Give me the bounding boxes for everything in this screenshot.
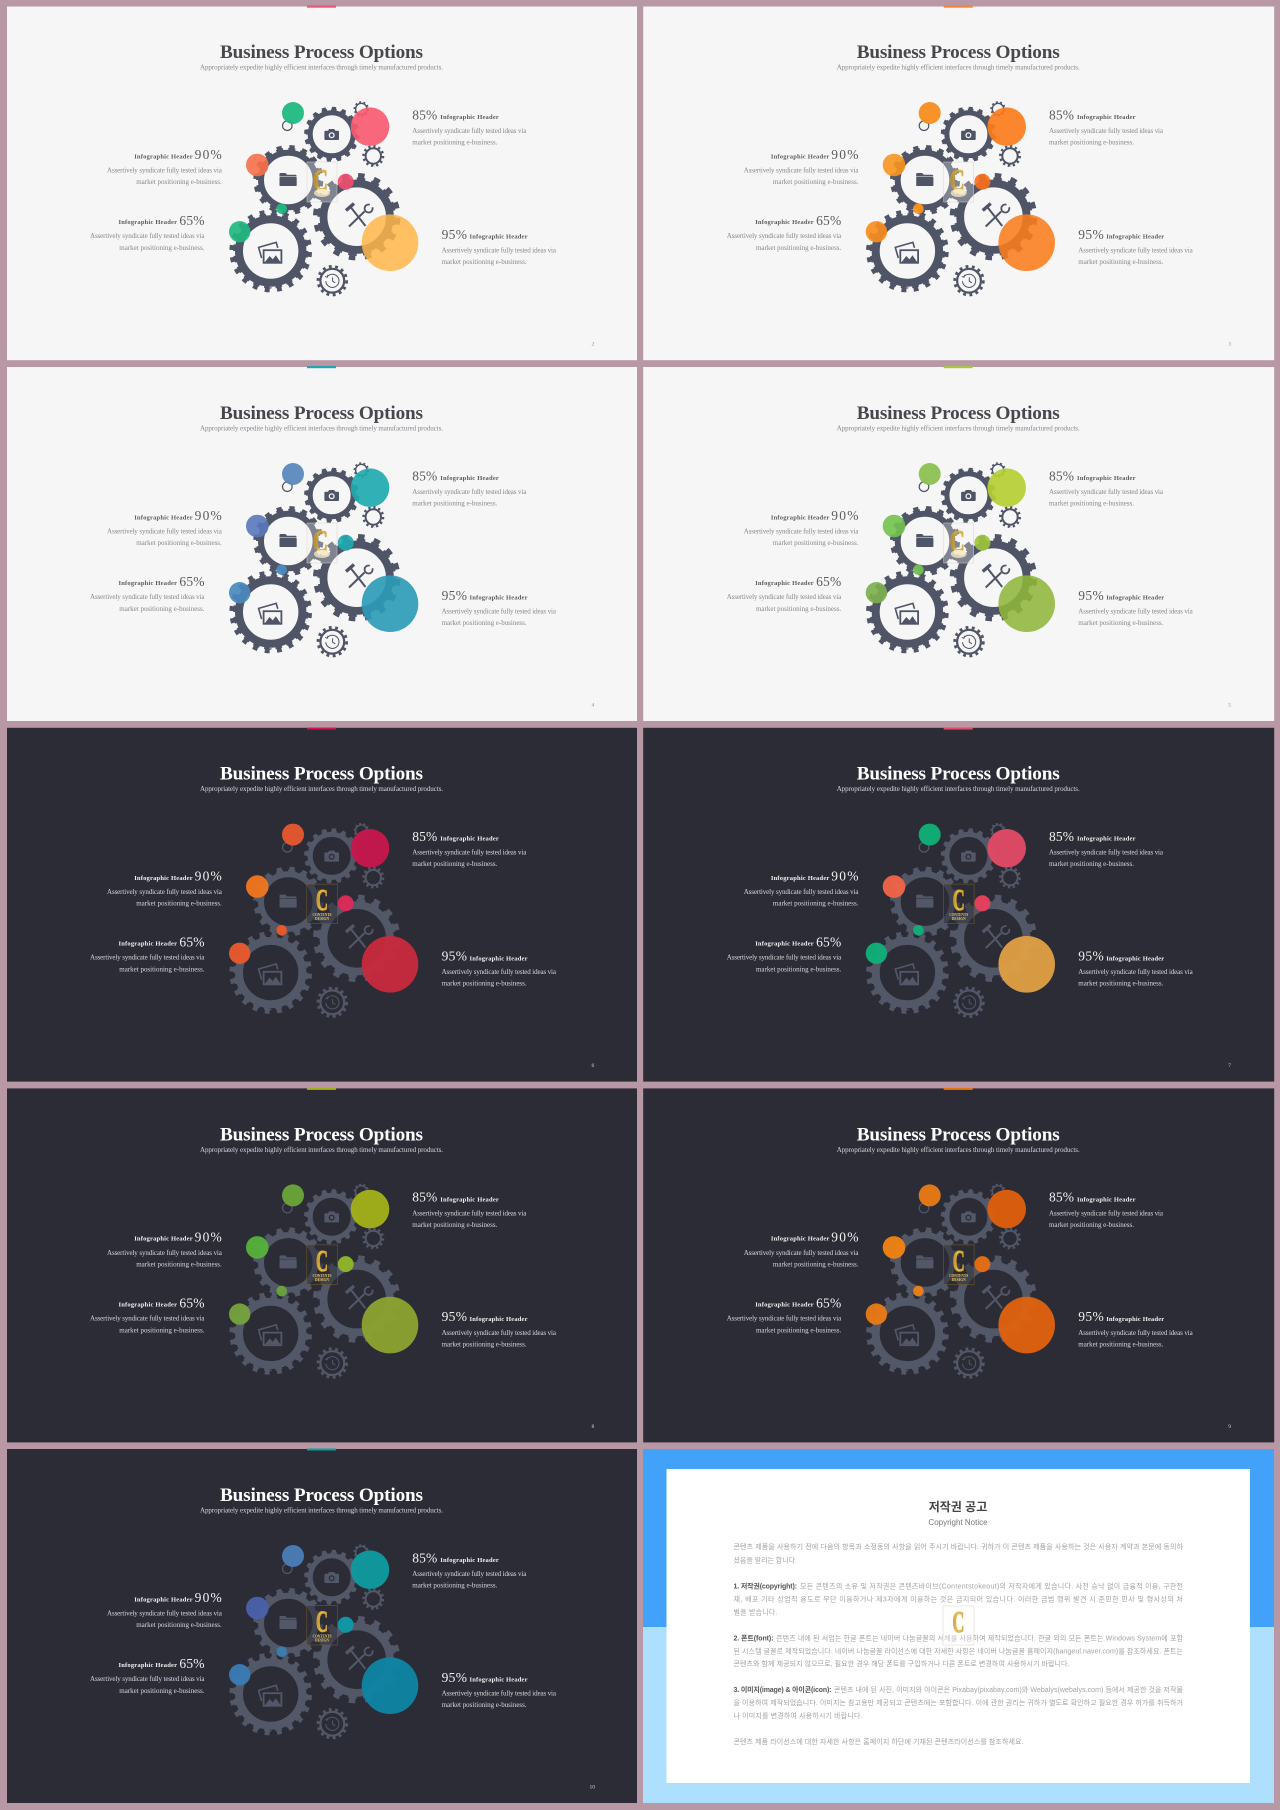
callout 85%: market positioning e-business. <box>1049 1221 1134 1229</box>
watermark stamp: C <box>316 882 328 917</box>
watermark stamp <box>944 882 974 924</box>
watermark stamp: C <box>950 523 965 558</box>
callout 65%: market positioning e-business. <box>119 1687 205 1695</box>
callout 65%: Assertively syndicate fully tested ideas via <box>727 954 842 962</box>
callout 90% <box>107 1590 223 1629</box>
panel: slide 5 light green <box>643 366 1274 721</box>
slide background <box>7 1449 637 1803</box>
callout 65%: market positioning e-business. <box>119 605 205 613</box>
page number: 4 <box>592 702 594 708</box>
callout 85%: Assertively syndicate fully tested ideas via <box>412 127 527 135</box>
callout 85%: 85% <box>412 468 437 483</box>
callout 65%: Assertively syndicate fully tested ideas via <box>727 593 842 601</box>
page number: 7 <box>1228 1063 1231 1069</box>
callout 95%: 95% <box>442 227 467 242</box>
slide background <box>7 6 637 360</box>
callout 95%: Assertively syndicate fully tested ideas via <box>442 246 557 254</box>
callout 95% <box>442 1309 557 1348</box>
watermark stamp: CONTENTS <box>312 1634 332 1638</box>
callout 85%: 85% <box>412 1190 437 1205</box>
watermark stamp: DESIGN <box>315 1278 329 1282</box>
accent bar <box>307 6 336 8</box>
callout 65%: 65% <box>179 574 204 589</box>
callout 65% <box>90 1656 205 1695</box>
callout 90%: Infographic Header <box>134 153 193 160</box>
paragraph 1 copyright: 1. 저작권(copyright): <box>734 1581 797 1590</box>
subtitle: Appropriately expedite highly efficient interfaces through timely manufactured products. <box>200 64 443 72</box>
callout 85% <box>412 829 527 868</box>
slide background <box>7 1088 637 1442</box>
callout 95%: Assertively syndicate fully tested ideas via <box>1078 608 1194 616</box>
callout 90% <box>744 147 859 186</box>
callout 90%: 90% <box>831 508 859 523</box>
callout 85%: market positioning e-business. <box>412 1582 498 1590</box>
callout 95%: Assertively syndicate fully tested ideas via <box>442 1690 557 1698</box>
callout 90%: Infographic Header <box>134 514 193 521</box>
callout 65% <box>90 935 205 974</box>
callout 90%: Infographic Header <box>134 875 193 882</box>
callout 65%: 65% <box>179 1295 204 1310</box>
panel: slide 9 dark orange <box>643 1088 1274 1442</box>
gear diagram <box>866 824 1055 1017</box>
paragraph 1 copyright: 재, 배포 기타 상업적 용도로 무단 이용하거나 제3자에게 이용하는 것은 금지되어 있습니다. 이러한 금법 행위 발견 시 준민한 민사 및 형사상의 처 <box>734 1594 1183 1603</box>
intro paragraph: 콘텐츠 제품을 사용하기 전에 다음의 항목과 소정동의 사항을 읽어 주시기 바랍니다. 귀하가 이 콘텐츠 제품을 사용하는 것은 사용자 계약과 본문에 동의하 <box>734 1542 1184 1551</box>
callout 85%: market positioning e-business. <box>412 1221 498 1229</box>
callout 65% <box>90 213 205 252</box>
callout 95%: 95% <box>442 948 467 963</box>
callout 95%: Assertively syndicate fully tested ideas via <box>442 968 557 976</box>
paragraph 1 copyright: 모든 콘텐츠의 소유 및 저작권은 콘텐츠바이브(Contentstokeout)의 저작자에게 있습니다. 사전 승낙 없이 금융적 이용, 구한전 <box>800 1581 1183 1590</box>
callout 95%: market positioning e-business. <box>442 258 527 266</box>
callout 95%: Assertively syndicate fully tested ideas via <box>442 608 557 616</box>
title: Business Process Options <box>220 1124 423 1145</box>
callout 95% <box>1078 588 1194 627</box>
title: Business Process Options <box>220 764 423 785</box>
subtitle: Appropriately expedite highly efficient interfaces through timely manufactured products. <box>200 1506 443 1514</box>
paragraph 2 font: 콘텐츠 내에 된 서업는 한글 폰트는 네이버 나눔글꼴의 서체를 사용하여 제작되었습니다. 한글 외의 모든 폰트는 Windows System에 포함 <box>776 1633 1184 1642</box>
callout 65%: 65% <box>816 1295 841 1310</box>
watermark stamp <box>944 1243 974 1284</box>
callout 85% <box>412 468 527 508</box>
callout 90% <box>107 508 223 547</box>
callout 90%: Infographic Header <box>771 153 829 160</box>
blue background top <box>643 1449 1274 1627</box>
callout 90%: market positioning e-business. <box>773 539 859 547</box>
page number: 3 <box>1228 342 1231 348</box>
callout 65%: Infographic Header <box>118 580 177 587</box>
callout 65%: 65% <box>179 213 204 228</box>
paragraph 1 copyright <box>734 1581 1183 1616</box>
watermark stamp: DESIGN <box>952 917 966 921</box>
callout 85%: Assertively syndicate fully tested ideas via <box>1049 127 1164 135</box>
callout 65%: Assertively syndicate fully tested ideas via <box>727 232 842 240</box>
panel: copyright notice <box>643 1449 1274 1803</box>
slide background <box>643 728 1274 1082</box>
callout 90%: market positioning e-business. <box>773 178 859 186</box>
gear diagram <box>229 463 418 656</box>
slide background <box>643 6 1274 360</box>
title: Business Process Options <box>220 1485 423 1506</box>
watermark stamp <box>307 882 337 924</box>
callout 85%: Infographic Header <box>1077 1196 1136 1203</box>
paragraph 3 image and icon <box>734 1685 1184 1720</box>
license note: 콘텐츠 제품 라이선스에 대한 자세한 사항은 홈페이지 하단에 기재된 콘텐츠라이선스를 참조하세요. <box>734 1737 1024 1746</box>
callout 65%: Infographic Header <box>118 219 177 226</box>
page number: 2 <box>592 342 594 348</box>
panel: slide 7 dark multicolor <box>643 728 1274 1082</box>
callout 90%: market positioning e-business. <box>136 1621 222 1629</box>
callout 95%: Assertively syndicate fully tested ideas via <box>1078 1329 1194 1337</box>
paragraph 2 font: 콘텐츠와 함께 제공되지 않으므로, 필요한 경우 해당 폰트를 구입하거나 다른 폰트로 변경하여 사용하시기 바랍니다. <box>734 1659 1070 1668</box>
watermark stamp: C <box>316 1243 328 1278</box>
subtitle: Appropriately expedite highly efficient interfaces through timely manufactured products. <box>200 424 443 432</box>
callout 95% <box>442 948 557 988</box>
callout 85%: Infographic Header <box>440 1557 499 1564</box>
callout 90%: Infographic Header <box>771 875 829 882</box>
accent bar <box>307 728 336 730</box>
watermark stamp <box>307 1604 337 1645</box>
accent bar <box>307 366 336 368</box>
callout 90%: Assertively syndicate fully tested ideas via <box>107 166 223 174</box>
paragraph 3 image and icon: 나 이미지를 변경하여 사용하시기 바랍니다. <box>734 1711 863 1720</box>
callout 95%: Infographic Header <box>1106 234 1164 241</box>
title: Business Process Options <box>220 42 423 63</box>
callout 95%: market positioning e-business. <box>442 619 527 627</box>
callout 90% <box>744 508 859 547</box>
callout 90%: Assertively syndicate fully tested ideas via <box>744 888 859 896</box>
watermark stamp <box>943 1604 974 1645</box>
page number: 10 <box>590 1784 595 1790</box>
page number: 8 <box>592 1424 594 1430</box>
callout 65%: 65% <box>816 935 841 950</box>
page number: 6 <box>592 1063 594 1069</box>
callout 85%: Infographic Header <box>1077 836 1136 843</box>
callout 85% <box>412 107 527 146</box>
callout 85% <box>412 1550 527 1590</box>
watermark stamp: C <box>313 523 328 558</box>
paragraph 3 image and icon: 3. 이미지(image) & 아이콘(icon): <box>734 1685 832 1694</box>
callout 85%: 85% <box>1049 468 1074 483</box>
subtitle: Appropriately expedite highly efficient interfaces through timely manufactured products. <box>837 1146 1080 1154</box>
accent bar <box>307 1088 336 1090</box>
callout 90%: Assertively syndicate fully tested ideas via <box>744 528 859 536</box>
page number: 5 <box>1228 702 1231 708</box>
callout 90%: market positioning e-business. <box>136 900 222 908</box>
accent bar <box>944 366 973 368</box>
callout 65%: market positioning e-business. <box>119 244 205 252</box>
white card <box>666 1469 1250 1783</box>
callout 95%: Infographic Header <box>1106 955 1164 962</box>
watermark stamp: C <box>316 1604 328 1638</box>
callout 65%: Infographic Header <box>118 1301 177 1308</box>
accent bar <box>944 728 973 730</box>
callout 85% <box>1049 468 1164 508</box>
callout 95%: 95% <box>1078 948 1104 963</box>
callout 90%: Infographic Header <box>771 1236 829 1243</box>
callout 90%: Assertively syndicate fully tested ideas via <box>107 528 223 536</box>
callout 90%: Infographic Header <box>134 1596 193 1603</box>
callout 95%: Infographic Header <box>470 595 528 602</box>
watermark stamp: C <box>953 882 965 917</box>
watermark stamp: DESIGN <box>315 917 329 921</box>
callout 95%: market positioning e-business. <box>442 980 527 988</box>
title: Business Process Options <box>857 764 1060 785</box>
callout 85% <box>1049 107 1164 146</box>
gear diagram <box>866 1184 1055 1377</box>
gear diagram <box>866 463 1055 656</box>
intro paragraph: 셨음을 알리는 합니다. <box>734 1555 797 1564</box>
watermark stamp <box>307 1243 337 1284</box>
callout 85%: market positioning e-business. <box>412 860 498 868</box>
callout 90%: 90% <box>831 1229 859 1244</box>
paragraph 2 font: 2. 폰트(font): <box>734 1634 774 1642</box>
callout 85%: Infographic Header <box>1077 114 1136 121</box>
callout 65% <box>727 935 842 974</box>
callout 90%: market positioning e-business. <box>773 900 859 908</box>
callout 85%: Infographic Header <box>440 836 499 843</box>
panel: slide 4 light blue <box>7 366 637 721</box>
watermark stamp: C <box>950 162 965 197</box>
watermark stamp: C <box>953 1243 965 1278</box>
callout 85%: Assertively syndicate fully tested ideas via <box>1049 1209 1164 1217</box>
callout 65% <box>727 1295 842 1334</box>
callout 95%: 95% <box>442 588 467 603</box>
callout 90%: 90% <box>195 1590 222 1605</box>
callout 95% <box>1078 1309 1194 1348</box>
watermark stamp: C <box>313 162 328 197</box>
callout 90% <box>744 869 859 908</box>
accent bar <box>944 1088 973 1090</box>
callout 85%: market positioning e-business. <box>412 138 498 146</box>
callout 95% <box>442 588 557 627</box>
subtitle: Appropriately expedite highly efficient interfaces through timely manufactured products. <box>200 785 443 793</box>
callout 65%: Infographic Header <box>755 219 814 226</box>
callout 85%: 85% <box>1049 1190 1074 1205</box>
callout 95% <box>1078 227 1194 266</box>
callout 95%: 95% <box>1078 1309 1104 1324</box>
callout 65%: 65% <box>816 213 841 228</box>
callout 95%: 95% <box>1078 588 1104 603</box>
callout 65%: Assertively syndicate fully tested ideas via <box>727 1314 842 1322</box>
callout 95%: Assertively syndicate fully tested ideas via <box>1078 968 1194 976</box>
callout 95%: market positioning e-business. <box>1078 619 1164 627</box>
callout 85%: Infographic Header <box>440 114 499 121</box>
title: Business Process Options <box>857 1124 1060 1145</box>
callout 65%: Infographic Header <box>755 580 814 587</box>
callout 95%: Infographic Header <box>470 1316 528 1323</box>
callout 95%: Infographic Header <box>470 1677 528 1684</box>
callout 90% <box>744 1229 859 1268</box>
gear diagram <box>229 1545 418 1738</box>
callout 90% <box>107 147 223 186</box>
callout 65%: market positioning e-business. <box>756 966 841 974</box>
callout 65%: Assertively syndicate fully tested ideas via <box>90 232 205 240</box>
callout 65%: Infographic Header <box>755 941 814 948</box>
watermark stamp <box>307 523 337 563</box>
callout 65%: market positioning e-business. <box>756 605 841 613</box>
callout 65% <box>727 213 842 252</box>
callout 65%: market positioning e-business. <box>756 244 841 252</box>
callout 95% <box>442 1670 557 1709</box>
paragraph 1 copyright: 벌을 받습니다. <box>734 1607 778 1616</box>
paragraph 2 font: 된 시스템 글꼴로 제작되었습니다. 네이버 나눔글꼴 라이선스에 대한 자세한 사항은 네이버 나눔글꼴 홈페이지(hangeul.naver.com)를 참조하세요. 폰트는 <box>734 1646 1184 1655</box>
callout 65% <box>90 574 205 613</box>
callout 95%: market positioning e-business. <box>442 1701 527 1709</box>
callout 85% <box>1049 829 1164 868</box>
panel: slide 10 dark blue <box>7 1448 637 1803</box>
callout 95% <box>1078 948 1194 988</box>
gear diagram <box>866 102 1055 295</box>
callout 95% <box>442 227 557 266</box>
callout 85%: Infographic Header <box>1077 475 1136 482</box>
intro paragraph <box>734 1542 1184 1564</box>
callout 90%: Assertively syndicate fully tested ideas via <box>107 888 223 896</box>
callout 95%: market positioning e-business. <box>1078 1340 1164 1348</box>
callout 85%: Assertively syndicate fully tested ideas via <box>412 488 527 496</box>
title: Business Process Options <box>220 403 423 424</box>
callout 85%: market positioning e-business. <box>1049 500 1134 508</box>
callout 85%: 85% <box>412 107 437 122</box>
callout 90%: market positioning e-business. <box>136 1260 222 1268</box>
callout 90%: 90% <box>831 147 859 162</box>
watermark stamp: DESIGN <box>315 1638 329 1642</box>
callout 95%: Infographic Header <box>470 955 528 962</box>
subtitle: Appropriately expedite highly efficient interfaces through timely manufactured products. <box>837 64 1080 72</box>
callout 65%: 65% <box>179 935 204 950</box>
watermark stamp <box>307 162 337 202</box>
callout 65%: 65% <box>179 1656 204 1671</box>
callout 85%: 85% <box>1049 829 1074 844</box>
watermark stamp: CONTENTS <box>949 913 968 917</box>
callout 85% <box>1049 1190 1164 1229</box>
callout 85%: Assertively syndicate fully tested ideas via <box>412 1570 527 1578</box>
callout 90%: 90% <box>195 869 222 884</box>
callout 90%: Assertively syndicate fully tested ideas via <box>107 1249 223 1257</box>
callout 90% <box>107 869 223 908</box>
slide background <box>7 367 637 721</box>
callout 65%: Infographic Header <box>118 941 177 948</box>
callout 65%: Infographic Header <box>118 1662 177 1669</box>
callout 95%: Infographic Header <box>470 234 528 241</box>
panel: slide 2 light multicolor <box>7 6 637 360</box>
callout 65%: Infographic Header <box>755 1301 814 1308</box>
paragraph 3 image and icon: 을 이용하여 제작되었습니다. 이미지는 참고용만 제공되고 콘텐츠에는 포함합니다. 이에 관한 권리는 귀하가 별도로 확인하고 필요한 경우 허가를 취득하거 <box>734 1698 1183 1707</box>
accent bar <box>944 6 973 8</box>
callout 65%: market positioning e-business. <box>119 966 205 974</box>
callout 95%: Infographic Header <box>1106 1316 1164 1323</box>
callout 90%: Assertively syndicate fully tested ideas via <box>744 1249 859 1257</box>
callout 65% <box>90 1295 205 1334</box>
callout 65%: Assertively syndicate fully tested ideas via <box>90 954 205 962</box>
callout 85% <box>412 1190 527 1229</box>
callout 95%: 95% <box>1078 227 1104 242</box>
callout 65%: 65% <box>816 574 841 589</box>
watermark stamp: DESIGN <box>952 1278 966 1282</box>
title: Business Process Options <box>857 42 1060 63</box>
watermark stamp <box>944 523 974 563</box>
callout 85%: Assertively syndicate fully tested ideas via <box>412 1209 527 1217</box>
callout 90%: 90% <box>831 869 859 884</box>
callout 95%: market positioning e-business. <box>1078 980 1164 988</box>
blue background bottom <box>643 1627 1274 1803</box>
slide background <box>643 1088 1274 1442</box>
callout 90%: market positioning e-business. <box>136 178 222 186</box>
callout 85%: Assertively syndicate fully tested ideas via <box>412 849 527 857</box>
callout 85%: market positioning e-business. <box>1049 860 1134 868</box>
subtitle: Appropriately expedite highly efficient interfaces through timely manufactured products. <box>837 424 1080 432</box>
callout 65% <box>727 574 842 613</box>
callout 90%: 90% <box>195 1229 222 1244</box>
callout 95%: Assertively syndicate fully tested ideas via <box>1078 246 1194 254</box>
copyright subheading: Copyright Notice <box>928 1518 988 1527</box>
panel: slide 6 dark red <box>7 728 637 1082</box>
gear diagram <box>229 824 418 1017</box>
callout 90%: Infographic Header <box>134 1236 193 1243</box>
callout 90%: Assertively syndicate fully tested ideas via <box>744 166 859 174</box>
accent bar <box>307 1448 336 1450</box>
callout 90%: Infographic Header <box>771 514 829 521</box>
callout 65%: Assertively syndicate fully tested ideas via <box>90 1314 205 1322</box>
callout 85%: Infographic Header <box>440 475 499 482</box>
callout 90%: Assertively syndicate fully tested ideas via <box>107 1610 223 1618</box>
callout 65%: Assertively syndicate fully tested ideas via <box>90 593 205 601</box>
callout 95%: 95% <box>442 1670 467 1685</box>
gear diagram <box>229 102 418 295</box>
callout 90%: market positioning e-business. <box>136 539 222 547</box>
watermark stamp <box>944 162 974 202</box>
slide background <box>7 728 637 1082</box>
copyright heading: 저작권 공고 <box>929 1499 987 1514</box>
callout 95%: Infographic Header <box>1106 595 1164 602</box>
callout 95%: Assertively syndicate fully tested ideas via <box>442 1329 557 1337</box>
panel: slide 8 dark green <box>7 1088 637 1442</box>
callout 85%: Assertively syndicate fully tested ideas via <box>1049 488 1164 496</box>
paragraph 2 font <box>734 1633 1184 1668</box>
callout 85%: market positioning e-business. <box>1049 138 1134 146</box>
callout 65%: market positioning e-business. <box>119 1326 205 1334</box>
callout 95%: market positioning e-business. <box>442 1340 527 1348</box>
subtitle: Appropriately expedite highly efficient interfaces through timely manufactured products. <box>837 785 1080 793</box>
watermark stamp: CONTENTS <box>312 913 332 917</box>
callout 95%: market positioning e-business. <box>1078 258 1164 266</box>
slide background <box>643 367 1274 721</box>
callout 65%: market positioning e-business. <box>756 1326 841 1334</box>
watermark stamp: CONTENTS <box>312 1274 332 1278</box>
paragraph 3 image and icon: 콘텐츠 내에 된 사진, 이미지와 아이콘은 Pixabay(pixabay.com)와 Webalys(webalys.com) 등에서 제공한 것을 저작물 <box>834 1685 1184 1694</box>
callout 85%: 85% <box>1049 107 1074 122</box>
callout 90%: 90% <box>195 147 222 162</box>
callout 90%: market positioning e-business. <box>773 1260 859 1268</box>
watermark stamp: C <box>952 1604 964 1639</box>
gear diagram <box>229 1184 418 1377</box>
callout 85%: Assertively syndicate fully tested ideas via <box>1049 849 1164 857</box>
callout 65%: Assertively syndicate fully tested ideas via <box>90 1675 205 1683</box>
callout 95%: 95% <box>442 1309 467 1324</box>
callout 90%: 90% <box>195 508 222 523</box>
title: Business Process Options <box>857 403 1060 424</box>
subtitle: Appropriately expedite highly efficient interfaces through timely manufactured products. <box>200 1146 443 1154</box>
panel: slide 3 light orange <box>643 6 1274 360</box>
callout 90% <box>107 1229 223 1268</box>
page number: 9 <box>1228 1424 1231 1430</box>
watermark stamp: CONTENTS <box>949 1274 968 1278</box>
callout 85%: market positioning e-business. <box>412 500 498 508</box>
callout 85%: Infographic Header <box>440 1196 499 1203</box>
callout 85%: 85% <box>412 1550 437 1565</box>
callout 85%: 85% <box>412 829 437 844</box>
